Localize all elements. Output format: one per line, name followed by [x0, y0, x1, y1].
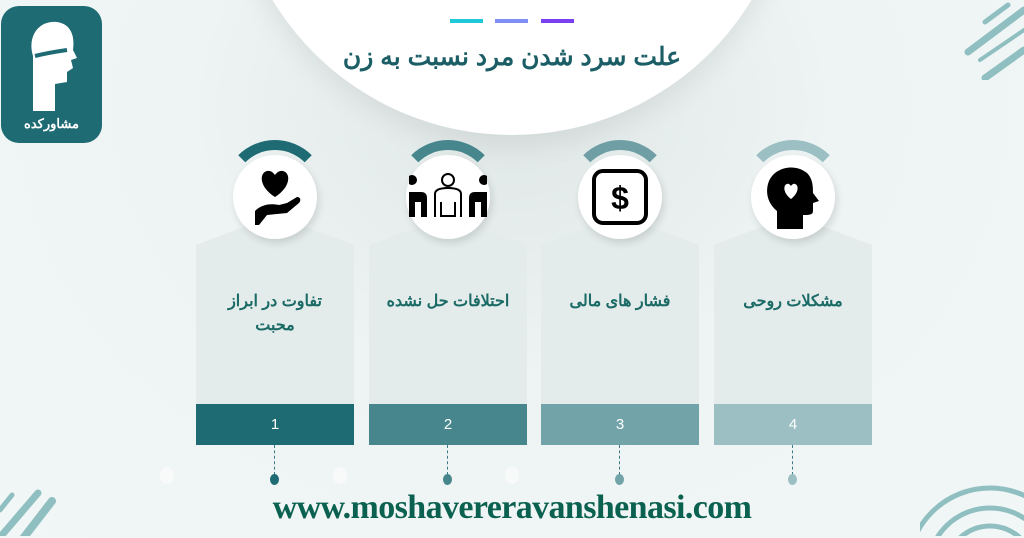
column 1: تفاوت در ابراز — [228, 293, 322, 310]
column 4 — [714, 140, 872, 485]
column 3 — [541, 140, 699, 485]
big white circle header — [232, 0, 792, 135]
column 2: احتلافات حل نشده — [387, 293, 509, 310]
icon: head silhouette — [31, 22, 77, 111]
icon: dollar — [578, 155, 662, 239]
column 1: 1 — [271, 416, 279, 433]
title: علت سرد شدن مرد نسبت به زن — [343, 43, 681, 71]
decor: stripes bottom left — [0, 490, 56, 536]
icon: people — [406, 155, 490, 239]
column 3: فشار های مالی — [570, 293, 670, 310]
decor: stripes top right — [964, 2, 1024, 80]
icon: heart in hand — [233, 155, 317, 239]
faint dots — [160, 467, 174, 484]
logo text: مشاورکده — [24, 116, 79, 131]
column 2 — [369, 140, 527, 485]
icon: head with heart — [751, 155, 835, 239]
accent bars — [450, 19, 574, 23]
column 3: 3 — [616, 416, 624, 433]
website url: www.moshavereravanshenasi.com — [273, 489, 751, 526]
column 2: 2 — [444, 416, 452, 433]
column 4: 4 — [789, 416, 797, 433]
decor: arcs bottom right — [920, 486, 1024, 536]
logo — [1, 6, 102, 143]
column 1: محبت — [255, 317, 295, 334]
column 1 — [196, 140, 354, 485]
column 4: مشکلات روحی — [743, 293, 843, 310]
icon: dollar: $ — [611, 180, 629, 216]
